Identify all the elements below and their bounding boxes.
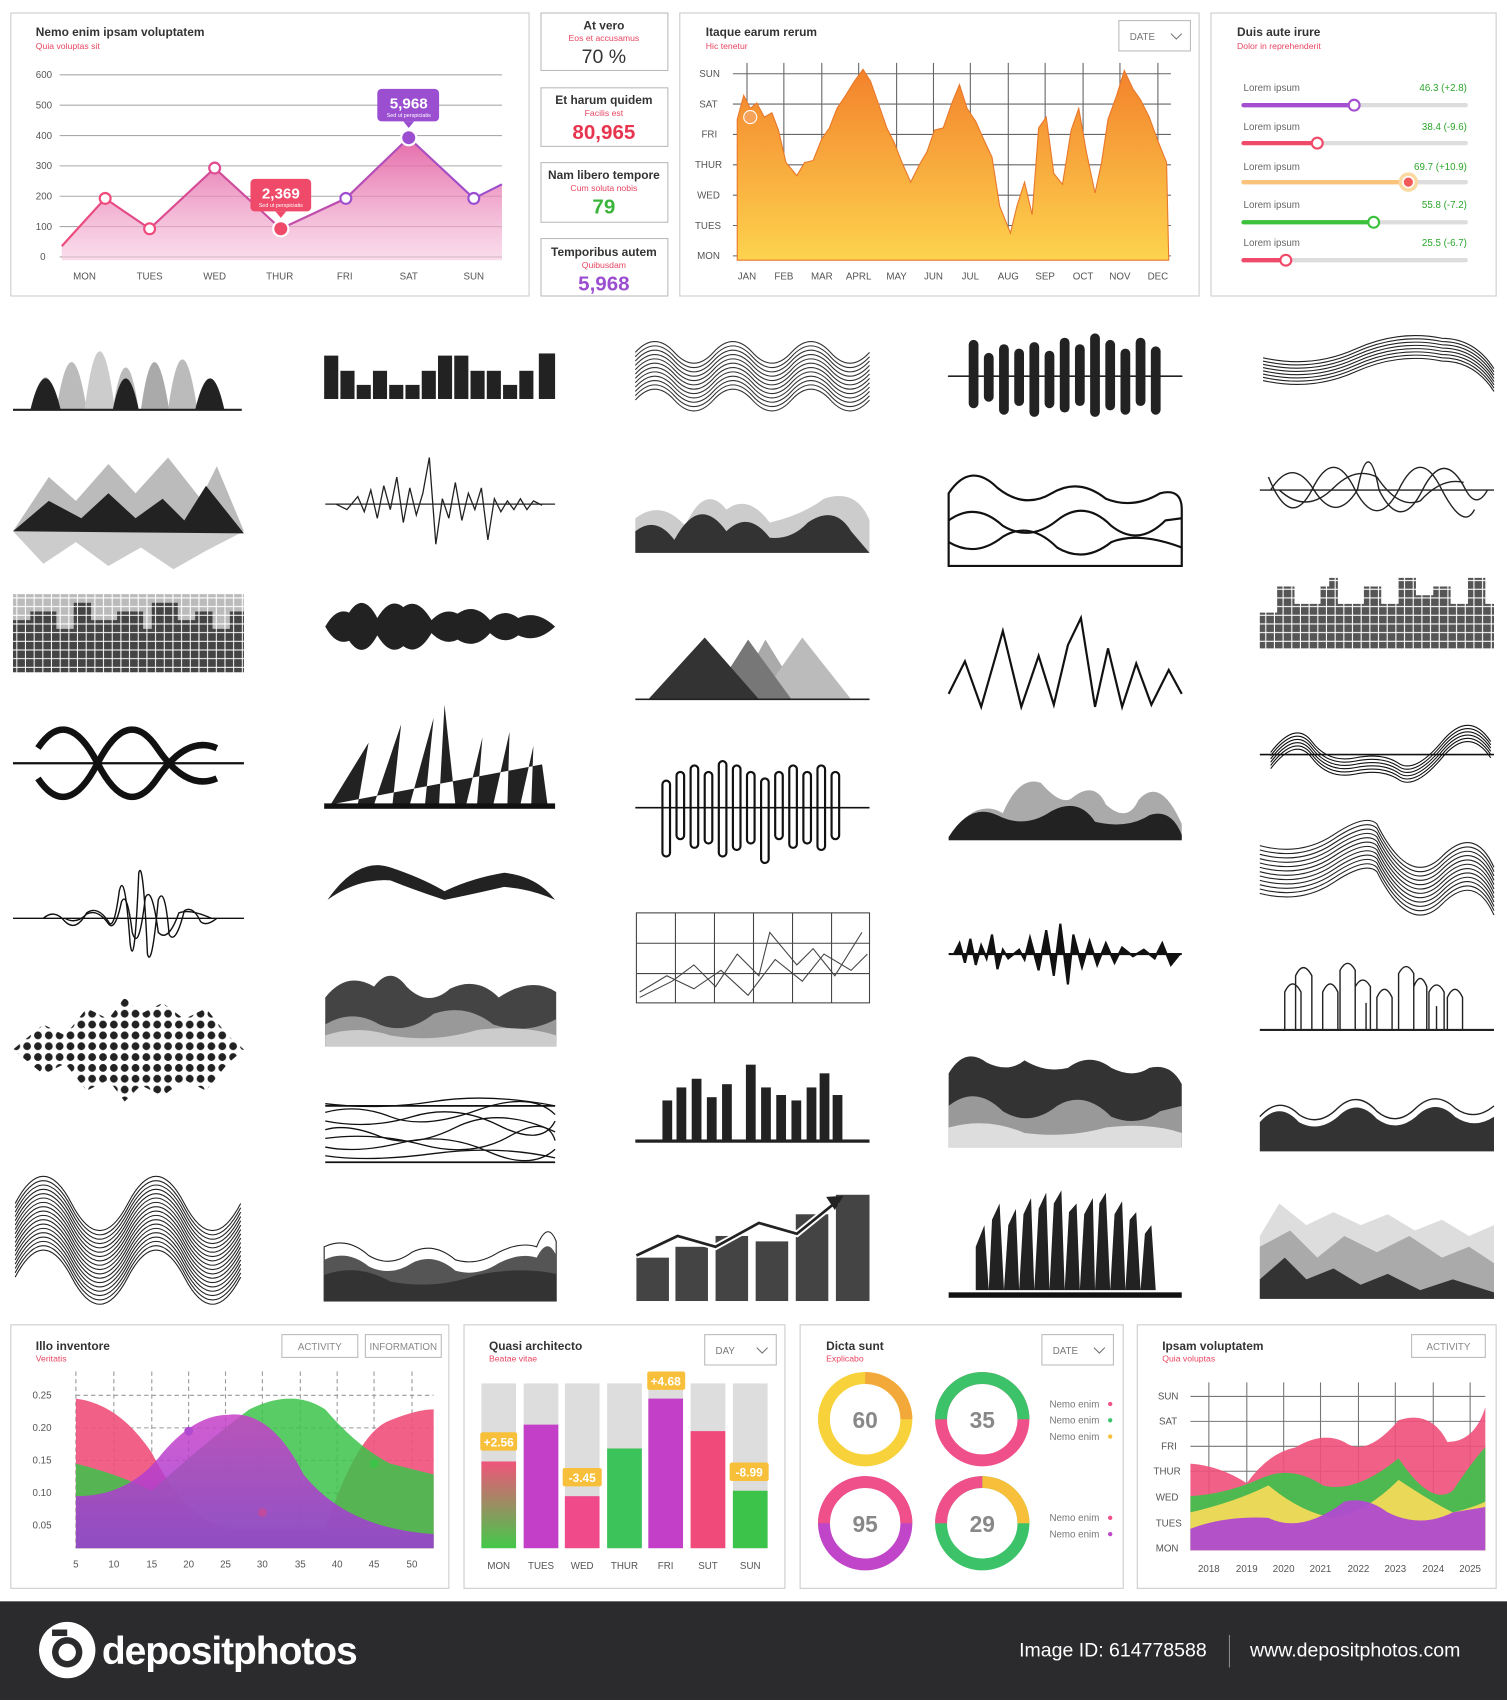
panel: sliders: Lorem ipsum — [1244, 162, 1300, 173]
panel: yearly orange area chart: MON — [697, 251, 720, 262]
icon: dot matrix — [13, 997, 244, 1102]
heading: panel 1 title: Nemo enim ipsam voluptatem — [36, 25, 204, 39]
callout: 2,369: 2,369 — [262, 185, 300, 202]
callout: 5,968: 5,968 — [390, 95, 428, 112]
panel: stacked area yearly: Quia voluptas — [1162, 1354, 1216, 1364]
panel: bar chart daily: Quasi architecto — [489, 1339, 582, 1353]
icon: rounded vertical bars — [949, 338, 1182, 412]
icon: layered bottom wave — [324, 1232, 556, 1301]
icon: wide wave lines — [15, 1176, 241, 1304]
panel: multi area chart: 0.05 — [33, 1521, 52, 1532]
stat: 5,968: 5,968 — [578, 273, 630, 296]
callout: 5,968 — [377, 89, 439, 128]
panel: multi area chart — [11, 1325, 449, 1588]
donut: 60 — [824, 1378, 906, 1460]
panel: yearly orange area chart: Hic tenetur — [706, 41, 748, 51]
icon: layered waves — [325, 976, 556, 1046]
panel: yearly orange area chart: JUL — [962, 272, 980, 283]
callout: 5,968: Sed ut perspiciatis — [387, 113, 431, 119]
panel: yearly orange area chart: SAT — [699, 99, 718, 110]
callout: 2,369: Sed ut perspiciatis — [259, 203, 303, 209]
panel: multi area chart: 50 — [407, 1560, 418, 1571]
panel: yearly orange area chart: Itaque earum rerum — [706, 25, 817, 39]
donut: 29: 29 — [970, 1511, 995, 1537]
legend: Nemo enim — [1049, 1432, 1099, 1443]
icon: mountains mirrored — [13, 458, 244, 569]
panel: bar chart daily: MON — [487, 1561, 510, 1572]
panel: stacked area yearly: 2021 — [1310, 1564, 1331, 1575]
panel: donuts: DATE — [1053, 1346, 1079, 1357]
panel: line chart weekly: WED — [203, 272, 226, 283]
stat: 5,968 — [541, 239, 668, 296]
panel: line chart weekly: THUR — [266, 272, 293, 283]
panel: stacked area yearly: 2019 — [1236, 1564, 1258, 1575]
icon: camera logo — [39, 1622, 95, 1678]
panel: stacked area yearly: TUES — [1156, 1519, 1182, 1530]
dropdown: date: DATE — [1130, 32, 1155, 43]
icon: noisy waveform — [949, 924, 1182, 984]
stat: 70%: Eos et accusamus — [569, 33, 640, 43]
icon: layered grey black hills — [949, 782, 1182, 840]
panel: stacked area yearly: 2022 — [1348, 1564, 1369, 1575]
icon: bar chart — [635, 1065, 870, 1143]
panel: bar chart daily: Beatae vitae — [489, 1354, 537, 1364]
panel: stacked area yearly: THUR — [1154, 1466, 1181, 1477]
panel: line chart weekly: MON — [73, 272, 96, 283]
stat: 79: Nam libero tempore — [548, 168, 660, 182]
panel: stacked area yearly: 2020 — [1273, 1564, 1295, 1575]
panel: line chart weekly: SAT — [400, 272, 418, 283]
panel: line chart weekly: 300 — [36, 161, 53, 172]
icon: rising bars arrow — [636, 1195, 870, 1301]
donut: 29 — [941, 1482, 1023, 1564]
panel: bar chart daily: WED — [571, 1561, 594, 1572]
icon: outlined box waves — [949, 476, 1182, 566]
panel: sliders: 38.4 (-9.6) — [1422, 122, 1467, 133]
stat: 80,965 — [541, 88, 668, 146]
callout: 2,369 — [250, 179, 311, 218]
donut: 60: 60 — [853, 1407, 878, 1433]
panel: sliders: Dolor in reprehenderit — [1237, 41, 1321, 51]
stat: 70%: 70 % — [582, 46, 626, 68]
panel: line chart weekly: TUES — [137, 272, 163, 283]
panel: yearly orange area chart: MAR — [811, 272, 833, 283]
panel: line chart weekly: SUN — [463, 272, 484, 283]
panel: bar chart daily: +2.56 — [484, 1435, 514, 1449]
panel: line chart weekly: 600 — [36, 70, 53, 81]
panel: sliders: 55.8 (-7.2) — [1422, 200, 1467, 211]
icon: layered black grey — [949, 1056, 1182, 1147]
panel: yearly orange area chart: TUES — [695, 221, 721, 232]
panel: stat boxes — [541, 13, 668, 296]
panel: bar chart daily: FRI — [658, 1561, 674, 1572]
panel: sliders: 69.7 (+10.9) — [1414, 162, 1467, 173]
icon: sharp spikes — [324, 705, 555, 809]
stat: 70%: At vero — [583, 18, 624, 32]
icon: thin wave band — [1263, 336, 1494, 391]
icon: crossing thick sines — [13, 730, 244, 797]
dropdown: date — [1119, 21, 1190, 51]
icon: triangle mountains — [635, 638, 870, 699]
panel: stacked area yearly: FRI — [1161, 1442, 1177, 1453]
donut: 35 — [941, 1378, 1023, 1460]
panel: sliders: Duis aute irure — [1237, 25, 1321, 39]
panel: stacked area yearly: 2023 — [1384, 1564, 1406, 1575]
stat: 70% — [541, 13, 668, 70]
panel: multi area chart: Veritatis — [36, 1354, 67, 1364]
panel: multi area chart: 0.10 — [33, 1488, 52, 1499]
donut: 95 — [824, 1482, 906, 1564]
panel: multi area chart: 45 — [369, 1560, 380, 1571]
panel: line chart weekly: 400 — [36, 131, 53, 142]
orange area — [737, 69, 1169, 260]
footer bar — [0, 1601, 1507, 1700]
url: www.depositphotos.com — [1249, 1640, 1460, 1662]
areas — [76, 1399, 434, 1548]
icon: wave band — [635, 342, 870, 411]
panel: sliders: Lorem ipsum — [1244, 238, 1300, 249]
stat: 79: 79 — [592, 196, 615, 219]
icon: black blob wave — [325, 603, 555, 650]
panel: line chart weekly: 100 — [36, 222, 53, 233]
panel: stacked area yearly — [1137, 1325, 1496, 1588]
panel: bar chart daily: SUN — [740, 1561, 761, 1572]
panel: yearly orange area chart — [680, 13, 1199, 296]
buttons — [282, 1335, 441, 1357]
panel: bar chart daily: -3.45 — [569, 1471, 596, 1485]
panel: line chart weekly: FRI — [337, 272, 353, 283]
panel: sliders: Lorem ipsum — [1244, 122, 1300, 133]
panel: donuts — [800, 1325, 1123, 1588]
panel: donuts: Explicabo — [826, 1354, 864, 1364]
panel: yearly orange area chart: NOV — [1109, 272, 1131, 283]
icon: pixel bars — [324, 353, 555, 399]
icon: wavy band — [1260, 820, 1494, 915]
icon: pixel bars grey — [1260, 578, 1494, 648]
stat: 80,965: 80,965 — [572, 121, 635, 144]
icon: lens wave — [327, 865, 555, 900]
panel: stacked area yearly: 2024 — [1422, 1564, 1445, 1575]
icon: tangled lines — [325, 1098, 555, 1162]
icon: overlapping sines — [1260, 462, 1494, 517]
panel: stacked area yearly: SUN — [1158, 1392, 1178, 1403]
panel: stacked area yearly: 2018 — [1198, 1564, 1220, 1575]
panel: yearly orange area chart: FEB — [774, 272, 793, 283]
buttons: ACTIVITY — [298, 1342, 342, 1353]
image id: Image ID: 614778588 — [1019, 1640, 1207, 1662]
brand name: depositphotos — [102, 1630, 357, 1673]
panel: multi area chart: 10 — [108, 1560, 120, 1571]
stat: 5,968: Temporibus autem — [551, 245, 657, 259]
icon: spiky oscillation — [325, 458, 555, 544]
panel: yearly orange area chart: OCT — [1073, 272, 1093, 283]
panel: yearly orange area chart: JUN — [924, 272, 943, 283]
panel: stacked area yearly: WED — [1156, 1493, 1178, 1504]
donut: 35: 35 — [970, 1407, 995, 1433]
panel: yearly orange area chart: MAY — [886, 272, 907, 283]
icon: multi-line wave — [1260, 725, 1494, 782]
panel: sliders: Lorem ipsum — [1244, 83, 1300, 94]
panel: yearly orange area chart: SEP — [1035, 272, 1055, 283]
buttons: INFORMATION — [370, 1342, 437, 1353]
panel: line chart weekly — [11, 13, 529, 296]
panel: multi area chart: 20 — [183, 1560, 195, 1571]
panel: yearly orange area chart: JAN — [738, 272, 756, 283]
panel: yearly orange area chart: THUR — [695, 160, 722, 171]
panel: line chart weekly: 0 — [40, 252, 46, 263]
panel: multi area chart: 25 — [220, 1560, 232, 1571]
panel: sliders — [1211, 13, 1496, 296]
legend: Nemo enim — [1049, 1416, 1099, 1427]
panel: line chart weekly: 500 — [36, 100, 53, 111]
panel: bar chart daily: -8.99 — [736, 1466, 763, 1480]
panel: bar chart daily: TUES — [528, 1561, 554, 1572]
legend: Nemo enim — [1049, 1513, 1099, 1524]
icon: layered mountains — [1260, 1203, 1494, 1299]
icon: layered hills — [635, 496, 870, 553]
panel: stacked area yearly: 2025 — [1459, 1564, 1482, 1575]
panel: sliders: 25.5 (-6.7) — [1422, 238, 1467, 249]
panel: bar chart daily: +4.68 — [651, 1375, 681, 1389]
panel: sliders: 46.3 (+2.8) — [1419, 83, 1467, 94]
panel: multi area chart: 15 — [146, 1560, 158, 1571]
panel: donuts: Dicta sunt — [826, 1339, 884, 1353]
panel: bar chart daily — [464, 1325, 785, 1588]
panel: yearly orange area chart: DEC — [1148, 272, 1168, 283]
panel: bar chart daily: SUT — [698, 1561, 718, 1572]
panel: sliders: Lorem ipsum — [1244, 200, 1300, 211]
panel: yearly orange area chart: APRL — [846, 272, 872, 283]
panel: multi area chart: 0.15 — [33, 1456, 52, 1467]
stat: 79: Cum soluta nobis — [570, 183, 638, 193]
panel: multi area chart: 35 — [295, 1560, 306, 1571]
panel: multi area chart: 0.20 — [33, 1423, 52, 1434]
icon: arc bars — [1260, 963, 1494, 1030]
panel: yearly orange area chart: AUG — [998, 272, 1019, 283]
panel: yearly orange area chart: FRI — [701, 130, 717, 141]
panel: stacked area yearly: SAT — [1159, 1417, 1177, 1428]
dropdown: day — [705, 1335, 776, 1365]
panel: stacked area yearly: ACTIVITY — [1427, 1342, 1471, 1353]
icon: spiky bars — [949, 1190, 1182, 1298]
stat: 79 — [541, 163, 668, 222]
icon: pixel grid bars — [13, 594, 244, 672]
stat: 5,968: Quibusdam — [582, 260, 626, 270]
icon: black wave with line — [1260, 1099, 1494, 1151]
legend — [1049, 1399, 1112, 1540]
icon: zigzag — [949, 618, 1182, 707]
panel: yearly orange area chart: SUN — [699, 69, 720, 80]
icon: vertical loops — [635, 761, 870, 863]
legend: Nemo enim — [1049, 1399, 1099, 1410]
icon: bell hills — [13, 351, 242, 410]
icon: grid line chart — [636, 913, 870, 1003]
panel: line chart weekly: 200 — [36, 191, 53, 202]
area line chart — [62, 130, 502, 260]
dropdown: day: DAY — [716, 1346, 735, 1357]
panel: multi area chart: 0.25 — [33, 1391, 52, 1402]
panel: multi area chart: 30 — [257, 1560, 268, 1571]
icon grid — [13, 336, 1494, 1304]
legend: Nemo enim — [1049, 1529, 1099, 1540]
panel: multi area chart: 40 — [332, 1560, 343, 1571]
stat: 80,965: Facilis est — [585, 108, 624, 118]
donut: 95: 95 — [853, 1511, 878, 1537]
panel: stacked area yearly: MON — [1156, 1543, 1178, 1554]
panel: multi area chart: 5 — [73, 1560, 79, 1571]
panel: yearly orange area chart: WED — [697, 190, 720, 201]
panel: line chart weekly: Quia voluptas sit — [36, 41, 100, 51]
panel: multi area chart: Illo inventore — [36, 1339, 110, 1353]
icon: thin oscillation — [13, 870, 244, 957]
panel: stacked area yearly: Ipsam voluptatem — [1162, 1339, 1263, 1353]
panel: bar chart daily: THUR — [611, 1561, 638, 1572]
stat: 80,965: Et harum quidem — [555, 93, 653, 107]
